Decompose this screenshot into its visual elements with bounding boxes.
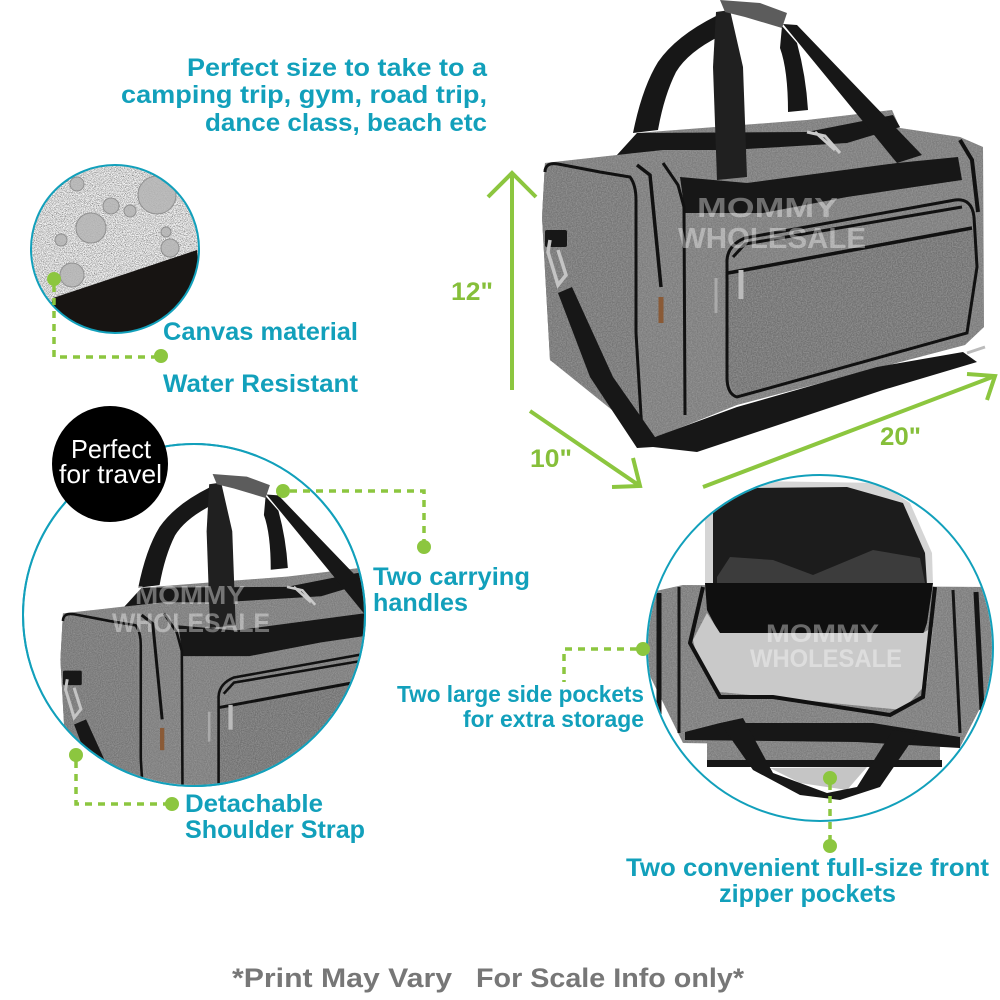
connector: canvas material — [47, 272, 168, 363]
arrow: depth — [530, 411, 640, 487]
water drops — [55, 176, 179, 287]
left close-up watermark — [112, 580, 270, 638]
label: 10 inches: 10" — [530, 445, 572, 473]
connector: front pockets — [823, 771, 837, 853]
label: side pockets — [397, 681, 644, 732]
right close-up watermark: WHOLESALE — [750, 645, 902, 673]
footer note — [232, 963, 745, 993]
label: detachable shoulder strap: Shoulder Strap — [185, 816, 365, 844]
connector: side pockets — [564, 642, 650, 682]
main bag watermark: MOMMY — [697, 192, 838, 223]
side pockets body — [647, 585, 993, 747]
zipper opening — [690, 587, 935, 715]
label: two carrying handles: Two carrying — [373, 563, 530, 591]
arrow: height — [488, 173, 536, 390]
interior pocket — [705, 583, 933, 635]
side piping and zippers — [545, 164, 642, 432]
left close-up watermark: MOMMY — [135, 580, 245, 610]
label: detachable shoulder strap: Detachable — [185, 790, 323, 818]
interior floor — [693, 613, 933, 710]
label: side pockets: for extra storage — [463, 706, 644, 732]
panel: canvas material close-up — [30, 164, 205, 340]
left close-up watermark: WHOLESALE — [112, 608, 270, 638]
main bag watermark — [678, 192, 866, 255]
heading: perfect size — [121, 54, 488, 137]
label: detachable shoulder strap — [185, 790, 365, 844]
heading: perfect size: camping trip, gym, road trip, — [121, 81, 487, 109]
right close-up watermark: MOMMY — [766, 620, 879, 648]
front black band — [680, 157, 962, 213]
badge: perfect for travel: for travel — [59, 459, 162, 489]
front panel — [707, 743, 940, 760]
footer note: *Print May Vary — [232, 963, 452, 993]
handles behind — [633, 16, 720, 133]
right close-up watermark — [750, 620, 902, 673]
arrow: width — [703, 374, 995, 487]
label: water resistant: Water Resistant — [163, 370, 359, 398]
front straps — [713, 10, 747, 180]
label: front zipper pockets: Two convenient full-size front — [626, 854, 990, 882]
heading: perfect size: dance class, beach etc — [205, 109, 487, 137]
bag body — [542, 110, 984, 437]
zipper pulls — [807, 132, 840, 153]
label: front zipper pockets — [626, 854, 990, 908]
main duffel bag photo — [542, 0, 985, 452]
label: 12 inches: 12" — [451, 278, 493, 306]
shoulder strap — [558, 287, 977, 452]
label: front zipper pockets: zipper pockets — [719, 880, 896, 908]
carrying handles — [720, 718, 917, 800]
label: 20 inches: 20" — [880, 423, 921, 451]
panel: open bag close-up — [647, 475, 993, 821]
connector: shoulder strap — [69, 748, 179, 811]
label: canvas material: Canvas material — [163, 318, 358, 346]
badge: perfect for travel: Perfect — [71, 434, 152, 464]
label: side pockets: Two large side pockets — [397, 681, 644, 707]
front pocket — [727, 228, 977, 397]
label: two carrying handles — [373, 563, 530, 617]
main bag watermark: WHOLESALE — [678, 223, 866, 255]
label: two carrying handles: handles — [373, 589, 468, 617]
heading: perfect size: Perfect size to take to a — [187, 54, 488, 82]
clasp — [545, 230, 567, 247]
footer note: For Scale Info only* — [476, 963, 745, 993]
connector: handles — [276, 484, 431, 554]
badge: perfect for travel — [52, 406, 168, 522]
lid — [705, 481, 933, 585]
panel: travel close-up — [22, 443, 366, 787]
top zipper band — [617, 115, 900, 155]
